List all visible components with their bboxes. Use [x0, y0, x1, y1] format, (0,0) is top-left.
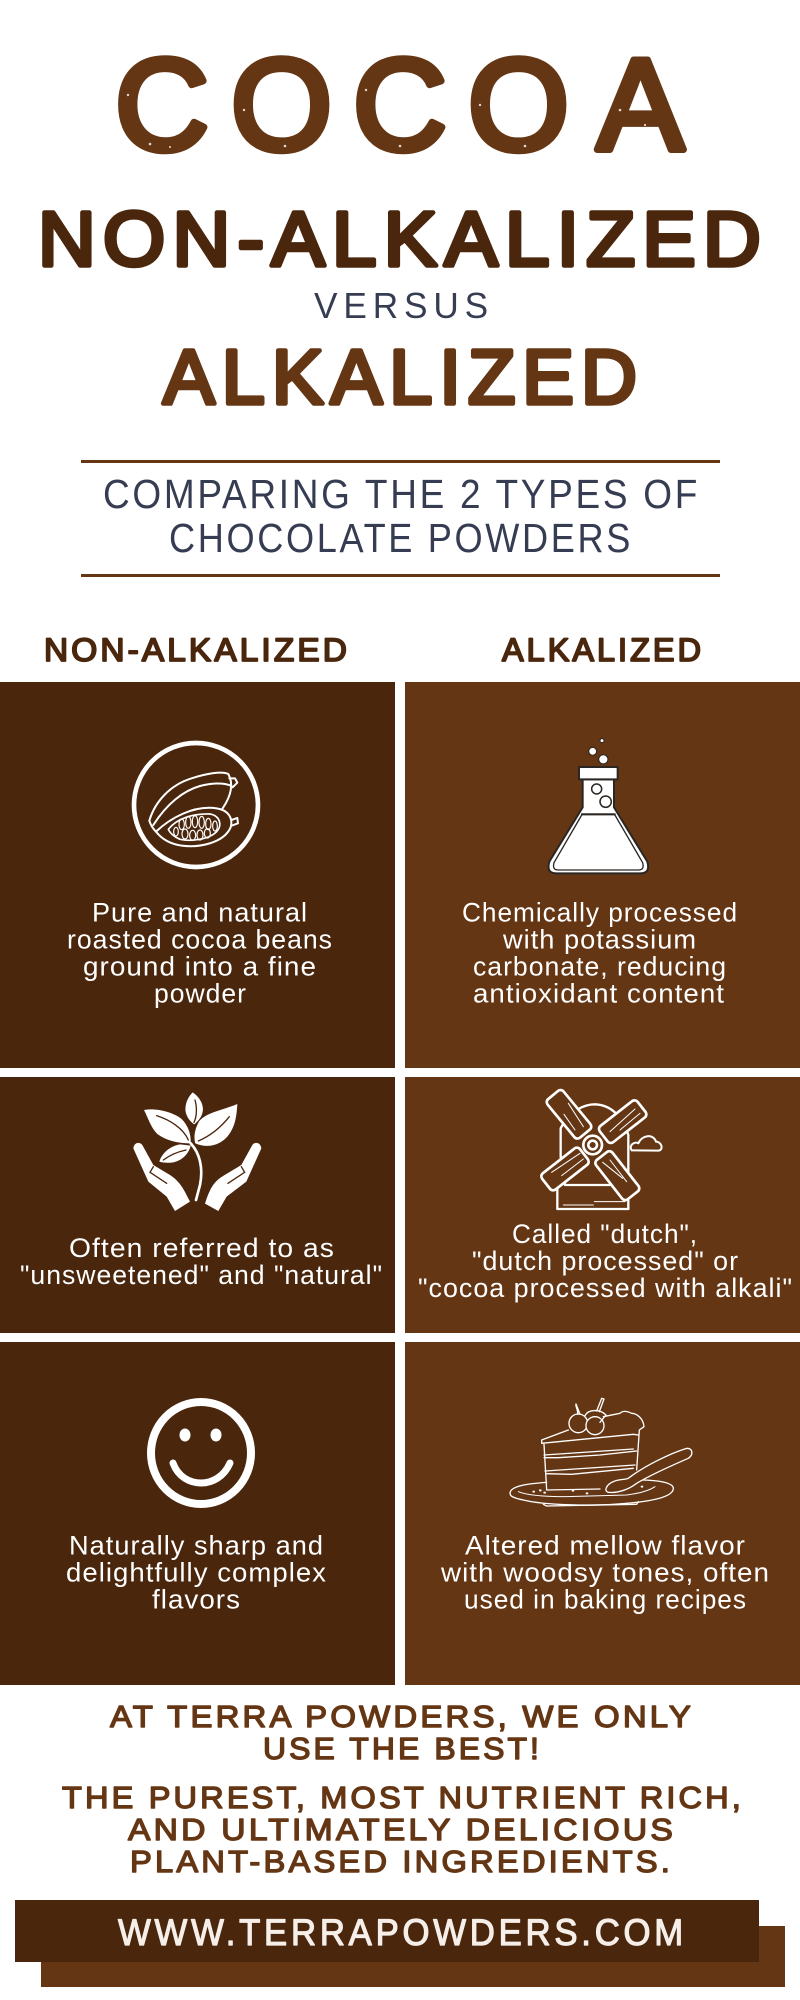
- callout: plant-based ingredients: [62, 1780, 744, 1879]
- heading: ALKALIZED: ALKALIZED: [163, 334, 644, 420]
- subtitle block with rules: [81, 460, 720, 577]
- callout: plant-based ingredients: THE PUREST, MOST NUTRIENT RICH,: [62, 1780, 744, 1815]
- text: often referred to as: [20, 1233, 383, 1290]
- text: naturally sharp: Naturally sharp and: [69, 1530, 324, 1560]
- panel: pure and natural: [0, 682, 395, 1068]
- text: naturally sharp: [66, 1530, 327, 1614]
- text: altered mellow flavor: Altered mellow flavor: [465, 1530, 746, 1560]
- text: called dutch: Called "dutch",: [512, 1219, 698, 1249]
- subtitle block with rules: CHOCOLATE POWDERS: [169, 515, 633, 561]
- panel: unsweetened and natural: [0, 1077, 395, 1333]
- text: altered mellow flavor: with woodsy tones, often: [440, 1558, 770, 1588]
- text: chemically processed: [462, 898, 738, 1008]
- text: pure and natural: ground into a fine: [83, 952, 317, 982]
- text: pure and natural: [67, 898, 333, 1008]
- callout: only use the best: AT TERRA POWDERS, WE ONLY: [110, 1699, 694, 1734]
- website banner: [15, 1900, 785, 1987]
- panel: sharp and complex flavors: [0, 1342, 395, 1685]
- text: chemically processed: Chemically processed: [462, 898, 738, 928]
- text: called dutch: [418, 1219, 793, 1303]
- column heading: non-alkalized: NON-ALKALIZED: [44, 632, 350, 668]
- icon: smiley face: [151, 1402, 251, 1504]
- text: chemically processed: carbonate, reducing: [473, 952, 727, 982]
- panel: mellow flavor: [405, 1342, 800, 1685]
- column heading: alkalized: ALKALIZED: [502, 632, 704, 668]
- icon: cake slice on plate: [510, 1398, 692, 1506]
- icon: hands holding plant: [133, 1092, 261, 1211]
- icon: windmill: [540, 1088, 662, 1209]
- panel: chemically processed: [405, 682, 800, 1068]
- text: naturally sharp: flavors: [152, 1584, 241, 1614]
- text: altered mellow flavor: used in baking recipes: [464, 1584, 747, 1614]
- icon: cocoa pod in circle: [134, 743, 258, 867]
- text: altered mellow flavor: [440, 1530, 770, 1614]
- text: called dutch: "dutch processed" or: [472, 1246, 739, 1276]
- callout: only use the best: [110, 1699, 694, 1766]
- text: chemically processed: with potassium: [502, 924, 697, 954]
- text: pure and natural: roasted cocoa beans: [67, 924, 333, 954]
- callout: only use the best: USE THE BEST!: [263, 1731, 542, 1766]
- text: often referred to as: Often referred to as: [69, 1233, 335, 1263]
- text: pure and natural: powder: [154, 978, 247, 1008]
- text: called dutch: "cocoa processed with alkali": [418, 1273, 793, 1303]
- text: often referred to as: "unsweetened" and "natural": [20, 1260, 383, 1290]
- website url: WWW.TERRAPOWDERS.COM: [118, 1912, 687, 1953]
- title: COCOA: COCOA: [115, 32, 684, 178]
- text: pure and natural: Pure and natural: [92, 898, 308, 928]
- label: VERSUS: VERSUS: [314, 285, 494, 326]
- callout: plant-based ingredients: PLANT-BASED INGREDIENTS.: [130, 1844, 673, 1879]
- text: chemically processed: antioxidant content: [473, 978, 725, 1008]
- panel: dutch processed: [405, 1077, 800, 1333]
- callout: plant-based ingredients: AND ULTIMATELY DELICIOUS: [128, 1812, 676, 1847]
- icon: lab flask: [548, 739, 648, 873]
- subtitle block with rules: COMPARING THE 2 TYPES OF: [103, 471, 700, 517]
- heading: NON-ALKALIZED: NON-ALKALIZED: [38, 196, 768, 282]
- text: naturally sharp: delightfully complex: [66, 1558, 327, 1588]
